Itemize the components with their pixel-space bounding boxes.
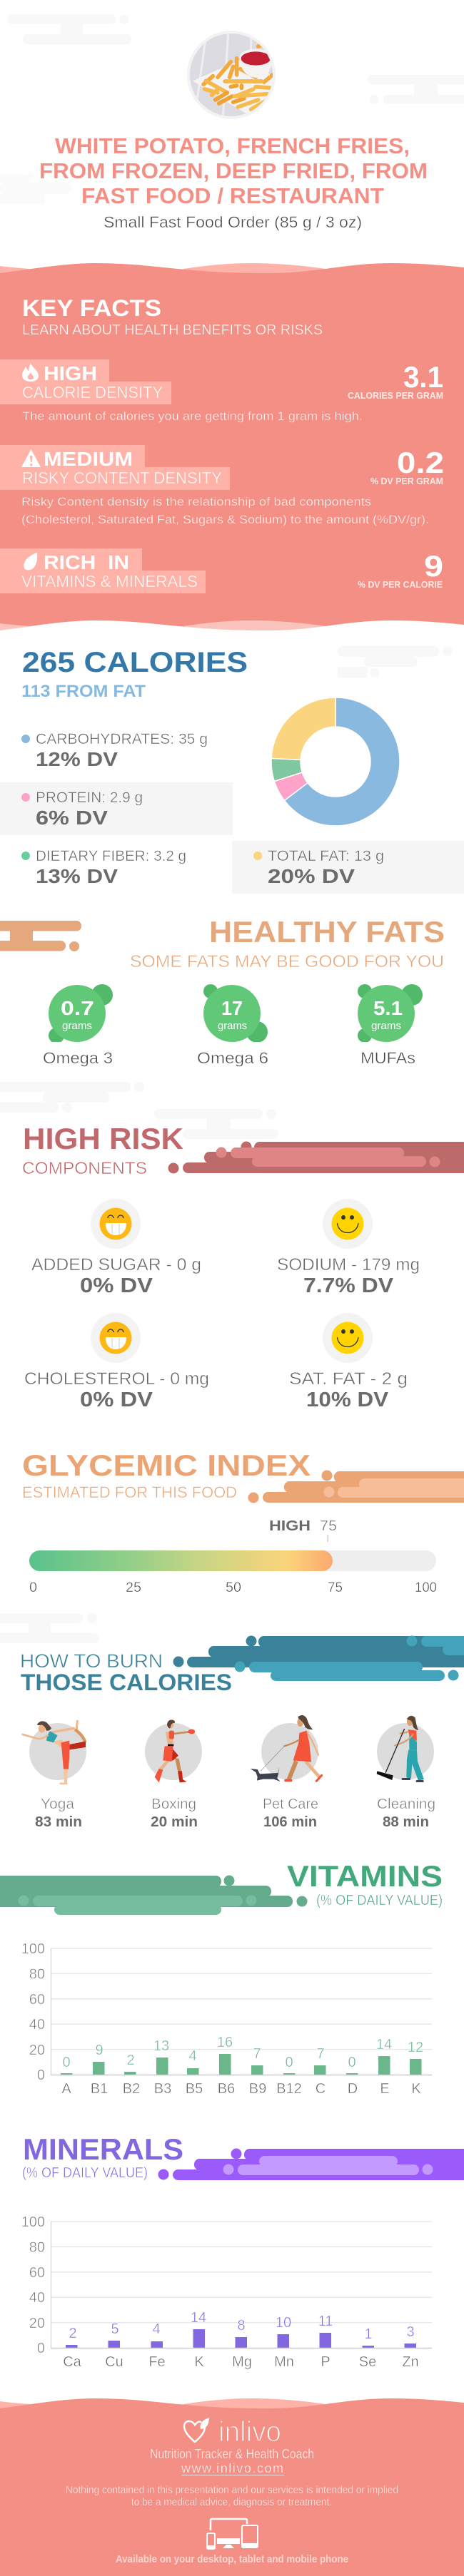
y axis labels: 20 [29,2316,45,2331]
bars [61,2054,421,2075]
text: risky content note: (Cholesterol, Saturated Fat, Sugars & Sodium) to the amount (%DV/gr). [21,513,429,526]
heading: how to burn: HOW TO BURN [20,1650,163,1672]
panel: calories [0,646,464,894]
stat: 9 percent DV per calorie [358,549,443,590]
label: medium risky content density: RISKY CONTENT DENSITY [22,469,222,487]
stat: 3.1 calories per gram: 3.1 [403,360,443,394]
text: saturated fat: 10% DV [306,1389,389,1411]
x axis labels: K [194,2354,204,2370]
stat: omega 3: 0.7 [61,997,94,1019]
legend: protein: PROTEIN: 2.9 g [36,789,143,806]
legend: total fat: 20% DV [268,865,355,887]
y axis labels: 60 [29,1992,45,2008]
value labels: 2 [126,2053,135,2068]
value labels [62,2035,423,2070]
stat: omega 6: Omega 6 [197,1049,268,1067]
logo wordmark: inlivo [218,2416,281,2448]
text: cleaning [377,1796,435,1830]
stat: 9 percent DV per calorie: 9 [424,549,443,583]
x axis labels: B6 [218,2081,235,2097]
text: availability caption: Available on your desktop, tablet and mobile phone [116,2553,348,2565]
activity: boxing [145,1720,202,1782]
y axis labels: 20 [29,2043,45,2058]
heading: vitamins: VITAMINS [287,1859,443,1893]
decorative clouds: header [0,14,464,205]
heading: high risk: HIGH RISK [23,1122,183,1155]
x axis labels: Fe [148,2354,166,2370]
bars [66,2329,416,2348]
y axis labels: 100 [21,2214,45,2230]
marker: high 75: 75 [320,1518,337,1534]
icon: grin face, cholesterol [91,1313,141,1363]
text: cholesterol: CHOLESTEROL - 0 mg [24,1369,209,1389]
panel: burn calories [0,1613,464,1830]
panel: healthy fats [0,915,445,1067]
x axis labels: A [61,2081,71,2097]
bar chart: minerals [21,2214,432,2370]
text: added sugar [31,1255,201,1297]
x axis labels: Se [359,2354,376,2370]
icon: smile face, saturated fat [323,1313,373,1363]
value labels: 12 [408,2040,423,2055]
value labels: 2 [69,2326,77,2341]
stat: MUFAs: MUFAs [360,1049,415,1067]
donut chart: macronutrients [271,697,400,826]
value labels: 16 [217,2035,233,2050]
value labels: 11 [318,2314,333,2329]
panel: high risk components [0,1082,464,1411]
value labels: 0 [285,2055,293,2070]
value labels: 9 [95,2043,104,2058]
x axis labels: B5 [186,2081,203,2097]
decorative clouds [0,1082,278,1139]
activity: pet care [251,1715,322,1782]
text: boxing [151,1796,198,1830]
value labels: 8 [237,2318,246,2334]
link: website: www.inlivo.com [181,2461,283,2475]
y axis labels: 60 [29,2265,45,2281]
gauge scale labels: 0 [29,1580,37,1595]
x axis labels [63,2354,419,2370]
legend: total fat [232,841,464,894]
text: saturated fat: SAT. FAT - 2 g [289,1369,408,1389]
x axis labels: B1 [91,2081,108,2097]
value labels: 3 [406,2324,415,2340]
heading: glycemic index: GLYCEMIC INDEX [22,1448,311,1482]
text: yoga: 83 min [35,1814,82,1830]
panel: minerals [21,2132,464,2370]
value labels: 10 [276,2315,291,2331]
subheading: components: COMPONENTS [22,1159,147,1178]
text: sodium: SODIUM - 179 mg [277,1255,420,1274]
x axis labels [61,2081,421,2097]
subheading: 113 from fat: 113 FROM FAT [21,682,146,701]
subheading: percent of daily value: (% OF DAILY VALUE) [316,1893,443,1908]
subheading: percent of daily value: (% OF DAILY VALUE) [22,2165,148,2181]
label: high calorie density [22,362,163,402]
value labels: 14 [376,2037,392,2053]
decorative bar [158,2148,464,2180]
legend: carbohydrates: 12% DV [36,748,118,770]
x axis labels: P [321,2354,331,2370]
subheading: key facts: LEARN ABOUT HEALTH BENEFITS OR RISKS [22,322,323,338]
y axis labels [21,2214,45,2356]
stat: 9 percent DV per calorie: % DV PER CALORIE [358,579,443,590]
label: medium risky content density [22,448,222,487]
icon: warning triangle [21,449,41,467]
text: sodium: 7.7% DV [303,1274,394,1297]
stat: 3.1 calories per gram: CALORIES PER GRAM [348,390,443,401]
label: high calorie density: HIGH [44,362,97,384]
value labels: 13 [153,2038,169,2054]
decorative bar [168,1141,464,1174]
label: rich in vitamins and minerals: VITAMINS & MINERALS [21,572,198,591]
gauge bar [29,1550,436,1571]
title [39,133,428,208]
fact label backgrounds [0,359,230,593]
x axis labels: C [316,2081,326,2097]
decorative bar [0,1876,307,1915]
heading: key facts: KEY FACTS [22,295,161,321]
subheading: estimated: ESTIMATED FOR THIS FOOD [22,1483,237,1501]
text: disclaimer [66,2484,398,2508]
value labels: 4 [152,2321,161,2337]
y axis labels: 80 [29,2239,45,2255]
text: yoga: Yoga [41,1796,75,1812]
x axis labels: Mg [232,2354,252,2370]
food photo: french fries [186,29,278,121]
stat: MUFAs [358,984,423,1067]
stat: 0.2 percent DV per gram: 0.2 [397,446,444,479]
text: risky content note: Risky Content density is the relationship of bad components [21,495,371,508]
panel: glycemic index [22,1448,464,1595]
value labels: 4 [188,2048,197,2064]
legend: carbohydrates [21,731,208,770]
gauge scale labels [29,1580,437,1595]
stat: MUFAs: 5.1 [373,997,403,1019]
text: pet care: 106 min [263,1814,317,1830]
text: risky content note [21,495,429,526]
logo: inlivo heart [184,2418,209,2442]
decorative bar [173,1636,464,1681]
icon: devices [206,2519,258,2549]
value labels: 7 [253,2046,261,2062]
y axis labels: 40 [29,2290,45,2306]
text: cleaning: 88 min [383,1814,429,1830]
x axis labels: B2 [123,2081,140,2097]
text: boxing: 20 min [151,1814,198,1830]
text: added sugar: ADDED SUGAR - 0 g [31,1255,201,1274]
value labels: 5 [111,2321,119,2337]
x axis labels: Ca [63,2354,82,2370]
value labels: 7 [316,2046,325,2062]
text: boxing: Boxing [151,1796,196,1812]
text: disclaimer: Nothing contained in this presentation and our services is intended or implied [66,2484,398,2496]
label: medium risky content density: MEDIUM [44,448,133,470]
icon: flame [22,363,39,382]
text: cholesterol [24,1369,209,1411]
legend: protein [0,782,233,835]
bar chart: vitamins [21,1941,432,2097]
legend: dietary fiber: DIETARY FIBER: 3.2 g [36,848,186,864]
text: yoga [35,1796,82,1830]
x axis labels: B3 [154,2081,171,2097]
decorative bar [248,1471,464,1503]
stat: 0.2 percent DV per gram: % DV PER GRAM [370,476,443,486]
gauge scale labels: 50 [226,1580,241,1595]
label: rich in vitamins and minerals: RICH IN [44,551,129,573]
gauge scale labels: 25 [126,1580,141,1595]
value labels: 1 [364,2326,373,2342]
panel: vitamins [0,1859,443,2097]
legend: total fat: TOTAL FAT: 13 g [268,848,384,864]
value labels: 14 [191,2310,206,2326]
x axis labels: K [411,2081,421,2097]
stat: omega 6: grams [218,1020,247,1032]
legend: dietary fiber [21,848,186,887]
x axis labels: Zn [402,2354,419,2370]
gauge scale labels: 100 [415,1580,437,1595]
gauge scale labels: 75 [328,1580,343,1595]
stat: 3.1 calories per gram [348,360,443,401]
subheading: healthy fats: SOME FATS MAY BE GOOD FOR YOU [130,952,444,971]
panel: key facts [0,263,464,636]
heading: minerals: MINERALS [23,2132,183,2166]
x axis labels: Cu [105,2354,123,2370]
icon: smile face, sodium [323,1199,373,1249]
stat: omega 6 [197,984,268,1067]
marker: high 75: HIGH [269,1518,311,1534]
text: pet care: Pet Care [263,1796,318,1812]
text: calorie density note: The amount of calories you are getting from 1 gram is high. [22,409,363,423]
stat: omega 6: 17 [221,997,243,1019]
activity: cleaning [377,1716,434,1782]
marker: high 75 [269,1518,337,1542]
text: pet care [263,1796,318,1830]
heading: 265 calories: 265 CALORIES [22,647,248,678]
label: rich in vitamins and minerals [21,551,198,591]
y axis labels: 0 [37,2068,45,2083]
y axis labels: 100 [21,1941,45,1957]
value labels [69,2310,415,2342]
legend: dietary fiber: 13% DV [36,865,118,887]
legend: carbohydrates: CARBOHYDRATES: 35 g [36,731,208,747]
value labels: 0 [348,2055,356,2070]
title: FROM FROZEN, DEEP FRIED, FROM [39,158,428,183]
stat: omega 3 [43,984,113,1067]
y axis labels [21,1941,45,2083]
heading: healthy fats: HEALTHY FATS [209,915,445,949]
value labels: 0 [62,2055,71,2070]
heading: those calories: THOSE CALORIES [21,1670,232,1695]
x axis labels: B12 [276,2081,302,2097]
stat: 0.2 percent DV per gram [370,446,444,486]
text: sodium [277,1255,420,1297]
icon: grin face, added sugar [91,1199,141,1249]
panel: footer [0,2398,464,2576]
text: disclaimer: to be a medical advice, diagnosis or treatment. [131,2496,332,2508]
legend: protein: 6% DV [36,807,108,829]
activity: yoga [23,1721,86,1784]
x axis labels: E [380,2081,390,2097]
x axis labels: Mn [274,2354,294,2370]
text: tagline: Nutrition Tracker & Health Coach [150,2447,314,2461]
text: saturated fat [289,1369,408,1411]
subtitle: serving size: Small Fast Food Order (85 g / 3 oz) [104,213,362,231]
y axis labels: 80 [29,1967,45,1983]
icon: leaf [24,553,37,570]
label: high calorie density: CALORIE DENSITY [22,383,163,402]
x axis labels: B9 [249,2081,266,2097]
stat: omega 3: Omega 3 [43,1049,113,1067]
x axis labels: D [348,2081,358,2097]
decorative bar [0,921,81,951]
title: FAST FOOD / RESTAURANT [81,183,384,208]
text: added sugar: 0% DV [80,1274,153,1297]
decorative cloud [338,646,453,678]
text: cleaning: Cleaning [377,1796,435,1812]
y axis labels: 0 [37,2341,45,2356]
stat: MUFAs: grams [371,1020,401,1032]
decorative cloud [0,1613,99,1643]
stat: omega 3: grams [62,1020,92,1032]
title: WHITE POTATO, FRENCH FRIES, [55,133,410,158]
y axis labels: 40 [29,2017,45,2033]
text: cholesterol: 0% DV [80,1389,153,1411]
